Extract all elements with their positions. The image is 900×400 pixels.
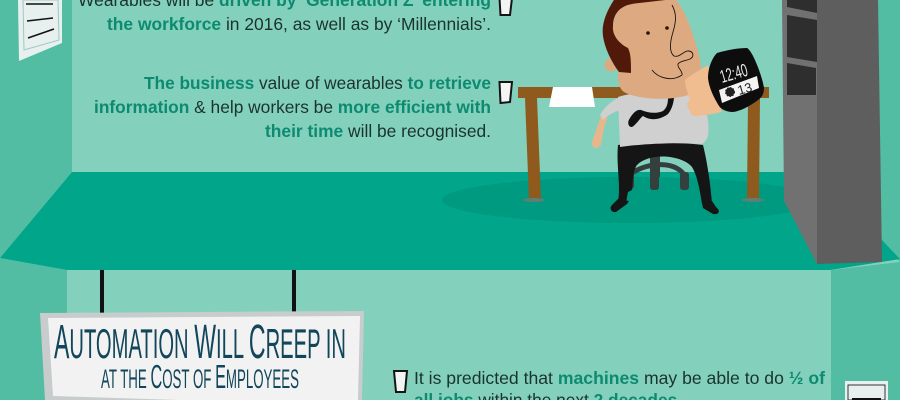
upper left side wall <box>0 0 72 258</box>
head <box>612 0 701 99</box>
paper on desk <box>549 87 595 107</box>
far arm <box>592 116 608 148</box>
smartwatch <box>708 48 764 112</box>
shirt <box>618 92 709 147</box>
lower room back wall <box>67 268 831 400</box>
man character <box>592 0 722 214</box>
chair <box>627 155 689 190</box>
text block: business value: their time will be recognised. <box>265 121 491 141</box>
text block: business value: information & help workers be more efficient with <box>94 97 491 117</box>
lower right note icon <box>845 381 888 400</box>
wall note icon top left <box>18 0 62 61</box>
bullet icon one <box>500 0 512 15</box>
upper room back wall <box>72 0 882 175</box>
watch time: 12:40 <box>718 60 750 87</box>
lower left side wall <box>0 258 67 400</box>
bullet icon three <box>394 371 407 392</box>
smile <box>652 70 682 79</box>
heading line one: AUTOMATION WILL CREEP IN <box>54 316 346 369</box>
heading line two: AT THE COST OF EMPLOYEES <box>101 358 299 395</box>
text block: Generation Z: the workforce in 2016, as well as by ‘Millennials’. <box>107 14 491 34</box>
ear <box>604 58 618 72</box>
tie <box>628 98 674 127</box>
watch date: 13 <box>736 79 754 98</box>
text block: business value: The business value of wearables to retrieve <box>144 73 491 93</box>
watch date strip <box>719 76 759 103</box>
weather icon <box>726 88 734 96</box>
floor <box>0 172 900 270</box>
text block: Generation Z <box>78 0 491 34</box>
text block: machines: It is predicted that machines may be able to do ½ of <box>414 368 825 388</box>
text block: business value <box>94 73 491 141</box>
trousers <box>618 143 712 204</box>
text block: machines <box>414 368 825 400</box>
bullet icon two <box>500 82 512 103</box>
sign: automation heading <box>40 311 364 400</box>
lower right side wall <box>831 262 900 400</box>
floor shadow <box>442 177 818 223</box>
upper right side wall <box>878 0 900 262</box>
eyes <box>646 31 650 35</box>
left shoe <box>611 199 629 212</box>
desk <box>518 87 769 202</box>
nose line <box>670 5 693 75</box>
filing cabinet <box>782 0 882 264</box>
forearm <box>685 65 722 116</box>
sleeve <box>600 98 620 120</box>
right shoe <box>702 201 719 214</box>
hair <box>603 0 672 73</box>
sign hanging cords <box>100 270 296 313</box>
